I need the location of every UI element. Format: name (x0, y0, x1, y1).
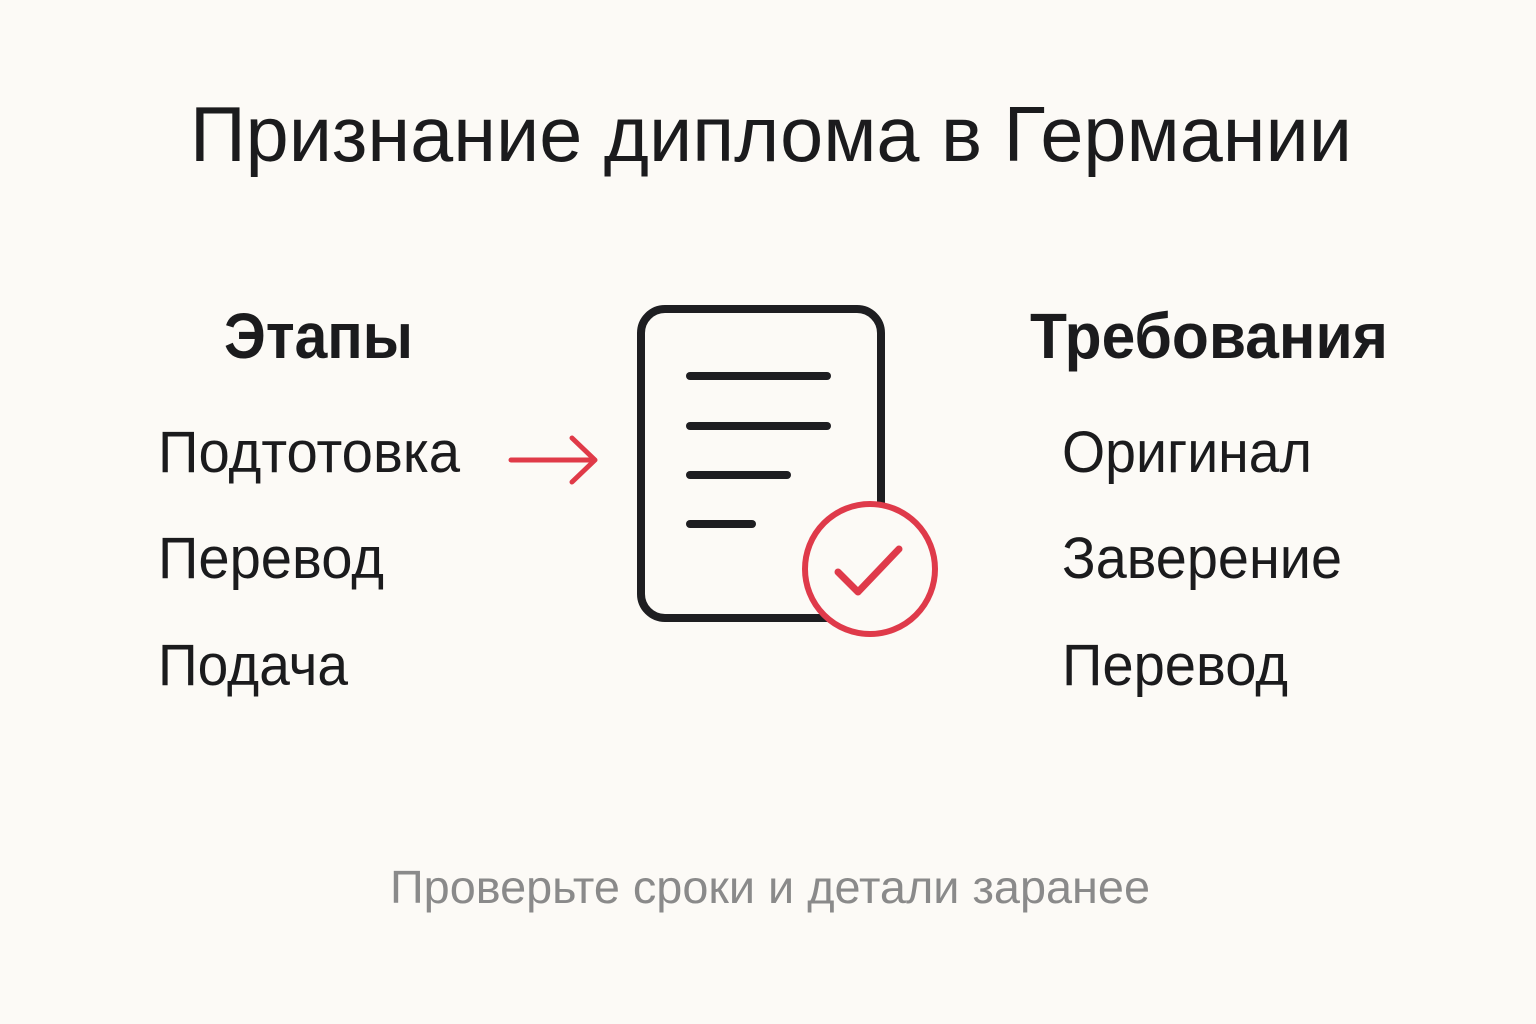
arrow (511, 438, 595, 482)
footer note: Проверьте сроки и детали заранее (390, 861, 1150, 913)
heading: requirements: Требования (1030, 300, 1388, 372)
stage item 1: Подтотовка (158, 420, 461, 485)
panel: stages (158, 300, 461, 698)
requirement item 1: Оригинал (1062, 420, 1312, 485)
panel: requirements (1030, 300, 1388, 698)
requirement item 2: Заверение (1062, 526, 1342, 591)
stage item 3: Подача (158, 633, 349, 698)
stage item 2: Перевод (158, 526, 384, 591)
icon: document with check (641, 309, 935, 634)
icon: check circle (805, 504, 935, 634)
title: Признание диплома в Германии (190, 90, 1352, 178)
heading: stages: Этапы (224, 300, 413, 372)
requirement item 3: Перевод (1062, 633, 1288, 698)
